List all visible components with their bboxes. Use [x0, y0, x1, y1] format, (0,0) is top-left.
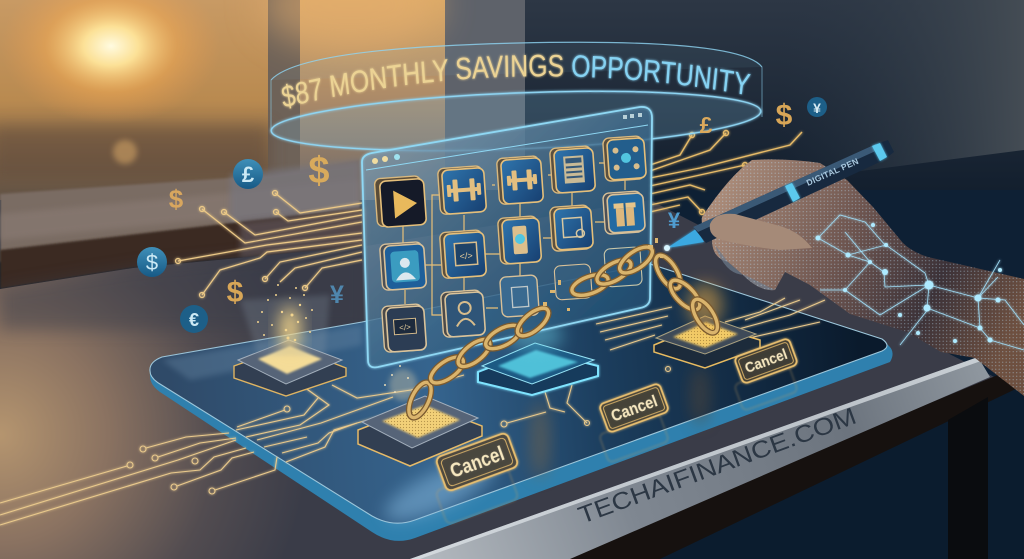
pen label: DIGITAL PEN	[805, 156, 860, 188]
digital pen	[664, 140, 894, 251]
glass tablet	[150, 264, 893, 541]
coin: yen: ¥	[813, 100, 821, 116]
coin: dollar: $	[146, 250, 158, 275]
pedestal: right gold	[654, 316, 760, 368]
right dark area under table	[551, 365, 1024, 559]
cancel button: middle: Cancel	[608, 391, 660, 426]
hand	[702, 159, 1024, 396]
cancel button: right: Cancel	[743, 346, 790, 377]
particle sprays	[240, 283, 723, 401]
icon: monitor code	[382, 304, 427, 352]
title: $87 MONTHLY SAVINGS OPPORTUNITY	[280, 52, 752, 110]
icon: person	[380, 242, 427, 290]
broken chains	[404, 238, 722, 421]
icon: calculator	[550, 146, 596, 193]
icon: search document	[550, 205, 593, 251]
pedestal: cyan	[478, 343, 598, 395]
icon: network	[603, 136, 646, 181]
cancel button: middle	[599, 383, 669, 433]
icon: document	[500, 275, 539, 317]
icon: headset	[441, 290, 486, 337]
pedestal: centre gold	[358, 396, 482, 466]
coin: pound	[233, 159, 263, 189]
gold dollar lower: $	[227, 276, 244, 309]
holographic app window	[362, 107, 652, 367]
icon: gift	[603, 191, 645, 234]
window sill	[0, 160, 360, 262]
watermark text: TECHAIFINANCE.COM	[575, 403, 860, 530]
connector lines	[403, 163, 625, 315]
coin: euro	[180, 305, 208, 333]
gold dollar large: $	[308, 150, 330, 192]
coin: dollar	[137, 247, 167, 277]
gold dollar right: $	[776, 99, 793, 132]
currency symbols	[137, 97, 827, 333]
left gold circuit lines	[176, 190, 362, 298]
blue yen: ¥	[330, 281, 344, 309]
gold dollar small: $	[169, 184, 184, 214]
cancel reflections	[435, 365, 798, 525]
steel edge strip with watermark	[410, 357, 990, 559]
coin: pound: £	[242, 162, 255, 187]
icon: dumbbell one	[437, 166, 487, 215]
thumb over pen	[710, 214, 812, 250]
floating title ring	[268, 42, 764, 152]
gold pound: £	[700, 112, 713, 138]
sill shadow band	[0, 208, 366, 289]
icon: dumbbell two	[496, 156, 544, 205]
chain: middle segment	[569, 242, 656, 299]
chain: left segment	[404, 303, 553, 421]
icon: play	[374, 175, 427, 228]
table surface	[0, 200, 1000, 559]
cancel button: front	[435, 432, 519, 492]
blue yen right: ¥	[668, 208, 681, 233]
pedestal: left gold	[234, 340, 346, 396]
chain fragments	[543, 238, 663, 311]
cancel button: front: Cancel	[447, 443, 507, 483]
icon: code window	[439, 230, 487, 279]
circuit traces on table and glass	[0, 298, 825, 525]
icon: monitor code: </>	[399, 323, 411, 332]
icon: faint tile	[554, 264, 592, 300]
cancel button: right	[734, 338, 798, 384]
coin: euro: €	[189, 310, 199, 330]
icon: phone	[498, 216, 542, 264]
window toolbar	[366, 113, 648, 170]
coin: yen	[807, 97, 827, 117]
table top shade	[0, 246, 366, 330]
right gold circuit lines	[650, 130, 802, 214]
hand neural network overlay	[816, 215, 1024, 350]
icon: code window: </>	[459, 250, 473, 261]
icon: faint tile two	[604, 247, 642, 287]
chain: right segment	[651, 251, 722, 337]
